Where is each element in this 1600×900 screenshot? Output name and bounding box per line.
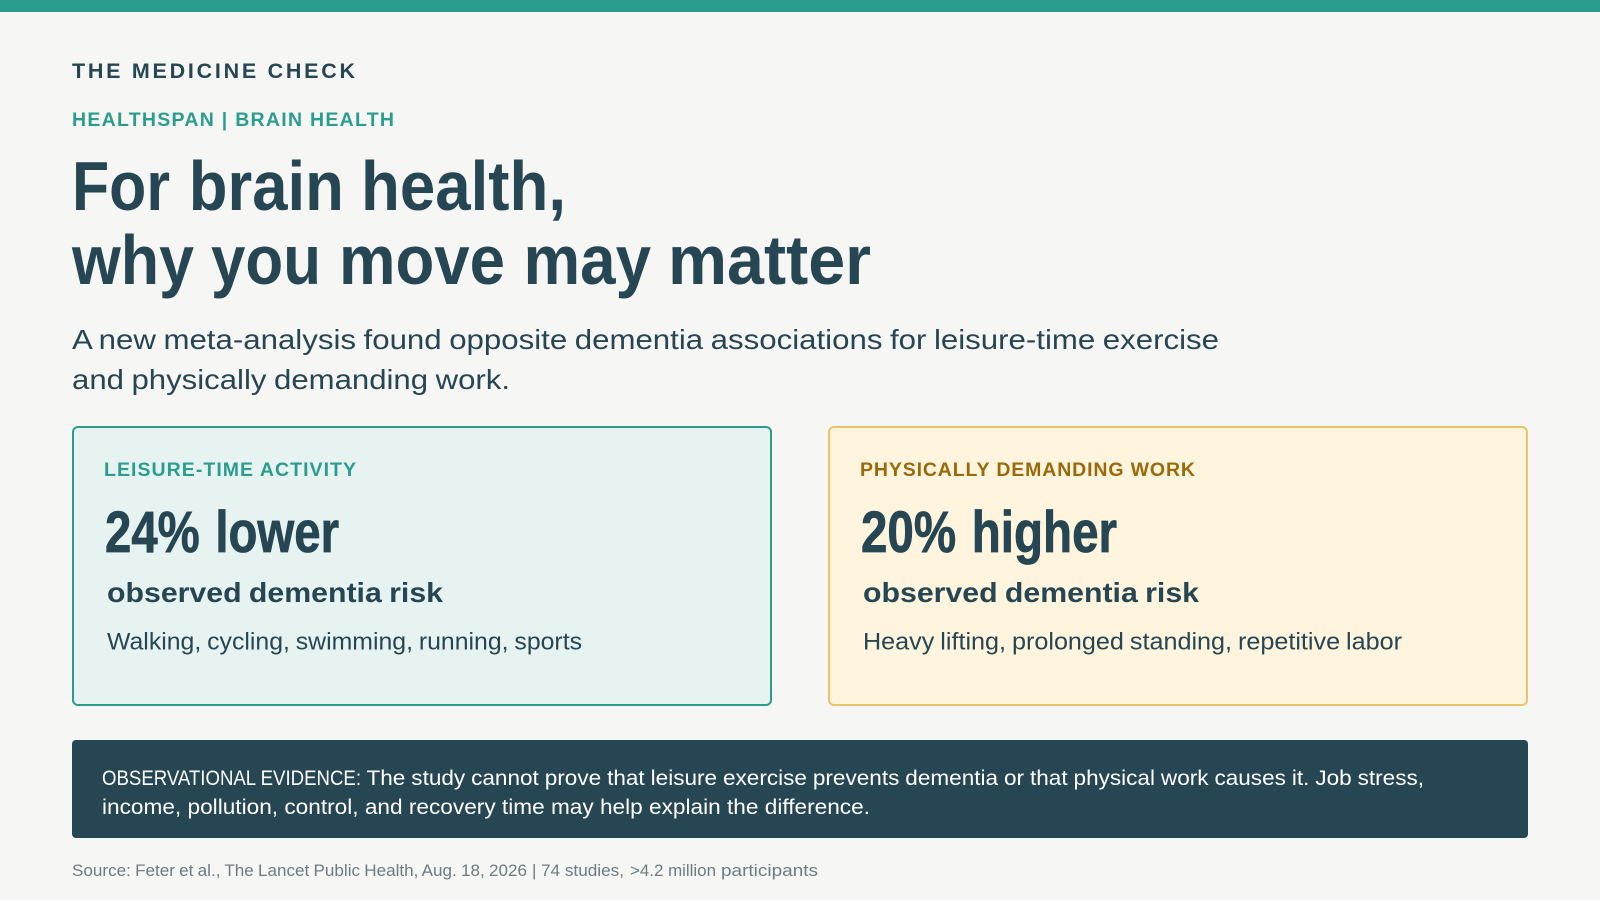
source line: >4.2 million [630,861,716,880]
source line: 74 studies, [541,861,624,880]
metric description: observed dementia risk [863,577,1199,608]
section tag: HEALTHSPAN | BRAIN HEALTH [72,109,394,131]
title: For [72,147,170,225]
brand name: THE MEDICINE CHECK [72,59,355,83]
subtitle: and physically demanding work. [72,364,510,395]
panel label: PHYSICALLY DEMANDING WORK [860,459,1195,481]
callout: observational evidence: The study cannot prove that leisure exercise prevents dementia or that physical work causes it. Job stress, [366,766,1424,790]
top accent bar [0,0,1600,12]
callout: observational evidence: OBSERVATIONAL EVIDENCE: [102,766,361,790]
title: you [211,221,321,299]
source line: Source: Feter et al., The Lancet Public Health, Aug. 18, 2026 [72,861,527,880]
examples: Walking, cycling, swimming, running, sports [107,628,582,656]
examples: Heavy lifting, prolonged standing, repetitive labor [863,628,1402,656]
title: health, [361,147,566,225]
title: may [524,221,651,299]
panel: physically demanding work [829,427,1527,705]
metric description: observed dementia risk [107,577,443,608]
callout: observational evidence: income, pollution, control, and recovery time may help explain the difference. [102,795,870,819]
source line [72,861,818,880]
panel: leisure-time activity [73,427,771,705]
title: matter [668,221,871,299]
title: move [339,221,505,299]
source line: | [532,861,536,880]
title: why [71,221,194,299]
title [71,147,871,299]
subtitle: A new meta-analysis found opposite dementia associations for leisure-time exercise [72,324,1219,355]
panel label: LEISURE-TIME ACTIVITY [104,459,356,481]
title: brain [189,147,344,225]
subtitle [72,324,1219,395]
key figure: 24% lower [105,500,339,565]
callout: observational evidence [72,740,1528,838]
source line: participants [721,861,818,880]
key figure: 20% higher [861,500,1117,565]
